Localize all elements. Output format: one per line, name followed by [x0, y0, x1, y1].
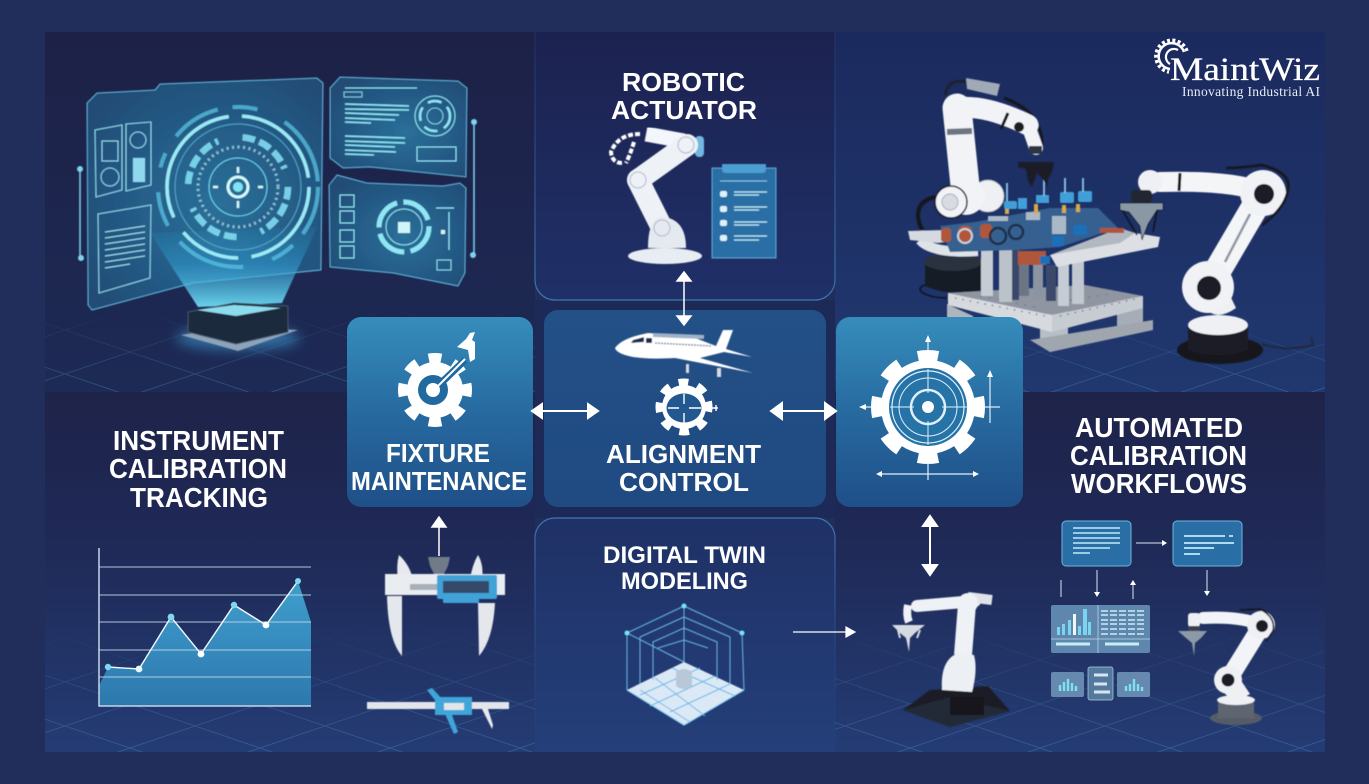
label: alignment control: ALIGNMENT — [606, 439, 761, 469]
bottom right screen details — [340, 195, 454, 270]
panel: digital twin modeling — [535, 518, 835, 752]
robot one arm — [935, 78, 1054, 218]
icon: alignment gear — [659, 382, 718, 432]
panel: robotic actuator — [535, 32, 835, 300]
flow: workflow steps — [1051, 521, 1242, 700]
fixture pallet — [947, 248, 1153, 352]
panel: top-right quadrant background — [835, 32, 1325, 392]
right connector rail — [473, 122, 475, 255]
heading: automated calibration workflows — [1070, 412, 1247, 499]
heading: digital twin modeling: MODELING — [621, 568, 748, 595]
label: alignment control — [606, 439, 761, 497]
arrow: caliper to fixture — [432, 517, 446, 556]
main hologram screen — [87, 78, 323, 310]
chart data points — [105, 578, 301, 672]
robot one base — [918, 197, 982, 298]
label: fixture maintenance: MAINTENANCE — [351, 466, 527, 496]
arrow: fixture to alignment — [532, 404, 598, 418]
heading: digital twin modeling — [603, 542, 766, 595]
card: precision gear — [836, 317, 1023, 507]
projection beam — [150, 227, 317, 307]
icon: precision gear — [859, 335, 1000, 480]
top right hologram screen — [330, 77, 467, 177]
dashboard panel — [1051, 605, 1150, 653]
arrow: actuator to alignment — [677, 272, 691, 325]
chart area — [99, 581, 311, 706]
hologram projector base — [176, 303, 300, 351]
workflow box one — [1062, 521, 1131, 566]
workflow arrows — [1061, 543, 1207, 599]
heading: automated calibration workflows: AUTOMATED — [1075, 412, 1243, 443]
panel: bottom-right quadrant background — [835, 392, 1325, 752]
icon: wireframe model — [624, 604, 744, 725]
mini charts — [1051, 667, 1150, 700]
icon: digital caliper — [385, 555, 505, 656]
chart gridlines — [99, 567, 311, 677]
robot two arm — [1120, 165, 1313, 364]
fixture table — [908, 178, 1160, 267]
radial gauge — [158, 107, 318, 267]
chart: calibration trend — [99, 548, 311, 706]
panel: bottom-left quadrant background — [45, 392, 535, 752]
label: fixture maintenance: FIXTURE — [386, 438, 490, 468]
icon: caliper side view — [367, 688, 509, 734]
panel: industrial robot cell — [908, 78, 1313, 364]
heading: instrument calibration tracking: TRACKING — [130, 482, 268, 513]
left connector rail — [79, 169, 81, 258]
logo: MaintWiz — [1156, 40, 1320, 99]
panel: holographic dashboard — [77, 77, 477, 351]
icon: checklist clipboard — [712, 164, 776, 258]
heading: automated calibration workflows: CALIBRATION — [1070, 440, 1247, 471]
heading: robotic actuator: ROBOTIC — [622, 67, 745, 97]
robot arm: lower right — [1178, 609, 1275, 725]
logo gear mark — [1156, 40, 1187, 72]
logo wordmark: MaintWiz — [1170, 52, 1320, 88]
panel: top-left quadrant background — [45, 32, 535, 392]
arrow: gear to robot — [923, 516, 937, 575]
icon: robot arm — [611, 134, 704, 264]
heading: robotic actuator: ACTUATOR — [611, 95, 757, 125]
logo tagline: Innovating Industrial AI — [1182, 84, 1320, 99]
workflow box two — [1173, 521, 1242, 566]
heading: instrument calibration tracking: CALIBRATION — [109, 453, 287, 484]
arrow: digital twin to robot — [793, 627, 855, 637]
heading: digital twin modeling: DIGITAL TWIN — [603, 542, 766, 569]
chart axes — [99, 548, 311, 706]
heading: robotic actuator — [611, 67, 757, 125]
top right screen details — [344, 88, 456, 161]
robot arm: lower centre — [892, 593, 1010, 727]
card: alignment control — [544, 310, 826, 507]
heading: instrument calibration tracking — [109, 425, 287, 513]
card: fixture maintenance — [347, 317, 533, 507]
icon: gear with tool — [403, 332, 475, 422]
label: alignment control: CONTROL — [619, 467, 749, 497]
heading: instrument calibration tracking: INSTRUMENT — [113, 425, 284, 456]
chart line — [108, 581, 298, 669]
label: fixture maintenance — [351, 438, 527, 496]
left widgets — [95, 122, 151, 293]
icon: aircraft — [615, 330, 753, 377]
arrow: alignment to gear — [771, 403, 836, 419]
bottom right hologram screen — [329, 175, 466, 286]
heading: automated calibration workflows: WORKFLOWS — [1071, 468, 1247, 499]
